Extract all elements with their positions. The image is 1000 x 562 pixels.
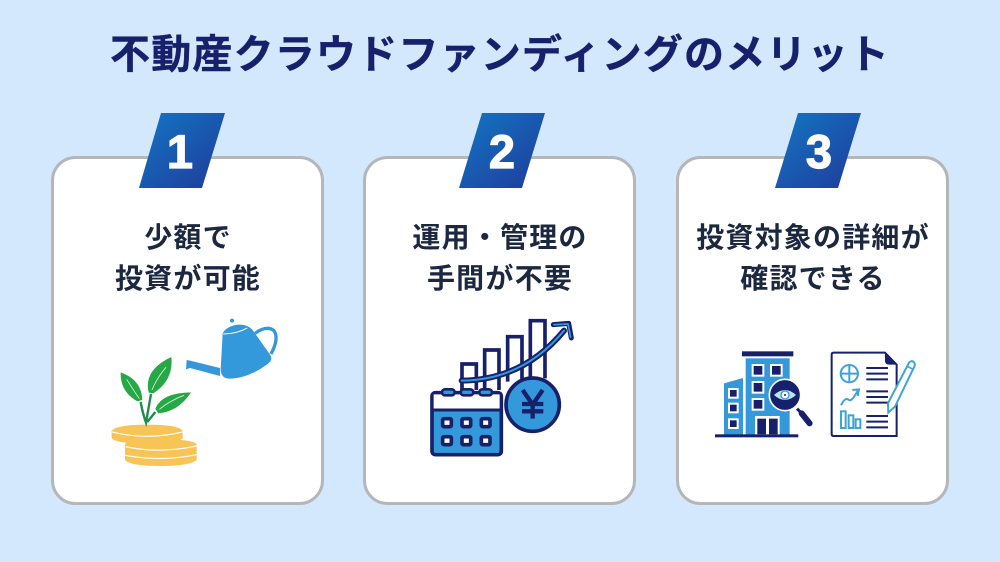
- badge 2: [459, 113, 545, 188]
- card 3 background: [678, 158, 948, 504]
- badge 3: [775, 113, 861, 188]
- icon: watering can over plant and coins: [112, 319, 276, 466]
- icon: calendar, yen coin and rising chart: [432, 321, 571, 455]
- panel: merit 2: [364, 113, 634, 504]
- coins: [112, 425, 197, 466]
- icon: building with magnifier: [715, 351, 810, 437]
- card 1 heading: 少額で: [144, 222, 232, 253]
- yen coin: [506, 378, 559, 431]
- badge 3: 3: [806, 125, 832, 178]
- card 2 heading: 手間が不要: [427, 262, 573, 294]
- bars: [462, 321, 545, 390]
- badge 1: 1: [167, 125, 193, 178]
- watering can: [186, 319, 276, 379]
- title: 不動産クラウドファンディングのメリット: [110, 32, 890, 77]
- rising arrow: [462, 323, 571, 381]
- card 2 heading: 運用・管理の: [412, 222, 588, 253]
- calendar: [432, 389, 501, 455]
- panel: merit 1: [52, 113, 322, 504]
- badge 2: 2: [489, 125, 515, 178]
- card 2 background: [364, 158, 634, 504]
- icon: document with pen: [832, 353, 915, 436]
- card 1 background: [52, 158, 322, 504]
- badge 1: [139, 113, 225, 188]
- panel: merit 3: [678, 113, 948, 504]
- plant: [121, 357, 191, 423]
- card 3 heading: 投資対象の詳細が: [696, 221, 930, 253]
- card 1 heading: 投資が可能: [115, 262, 261, 294]
- card 3 heading: 確認できる: [740, 263, 886, 294]
